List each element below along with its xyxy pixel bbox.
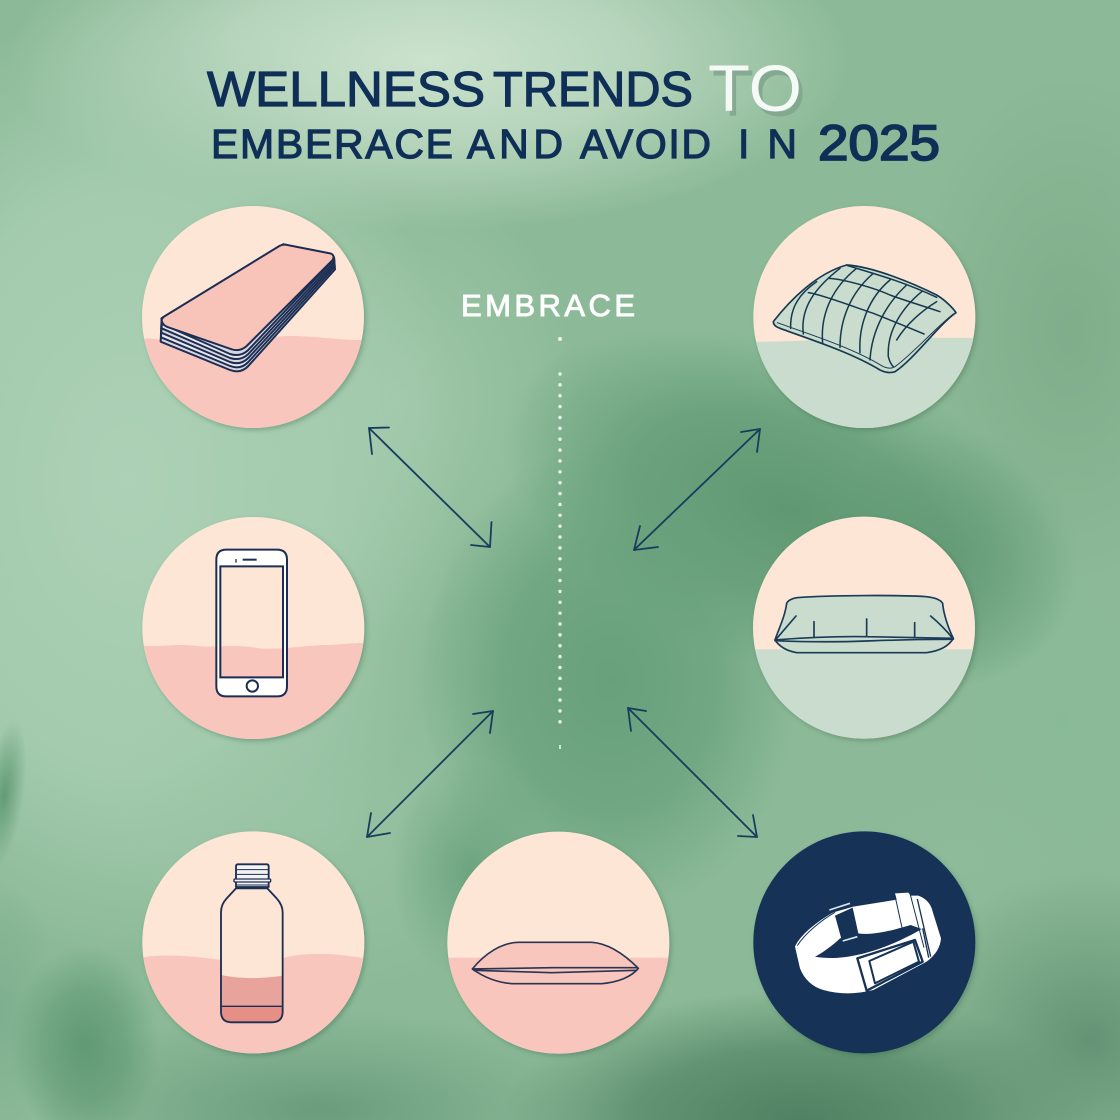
title line 1: WELLNESS — [207, 63, 485, 117]
arrow: top left — [369, 428, 492, 547]
title word: TO: TO — [708, 51, 802, 125]
title year: 2025 — [818, 115, 940, 171]
icon: fitness band — [795, 893, 941, 993]
title word: TO: TO — [712, 56, 806, 130]
panel: yoga mat circle — [142, 206, 364, 428]
arrow: bottom left — [367, 711, 493, 837]
icon: water bottle — [221, 864, 283, 1022]
dotted vertical divider — [558, 337, 562, 749]
icon: low pillow — [472, 942, 638, 984]
title — [207, 51, 940, 171]
icon: flat pillow — [775, 596, 953, 653]
title line 2 — [211, 121, 797, 167]
panel: flat pillow circle — [753, 517, 975, 739]
arrow: top right — [634, 429, 760, 550]
panel: phone circle — [142, 517, 364, 739]
title line 2: EMBERACE — [211, 121, 453, 167]
icon: smartphone — [216, 550, 287, 696]
title line 2: IN — [738, 121, 797, 167]
panel: low pillow circle — [447, 832, 669, 1054]
title line 2: AVOID — [580, 121, 711, 167]
title line 1 — [207, 63, 693, 117]
panel: fitness band circle — [753, 831, 975, 1053]
title line 1: TRENDS — [493, 63, 693, 117]
arrow: bottom right — [628, 708, 757, 837]
icon: stacked mat — [161, 244, 335, 371]
heading: embrace: EMBRACE — [461, 288, 635, 323]
icon: quilted pillow — [773, 265, 956, 373]
title line 2: AND — [467, 121, 563, 167]
panel: bottle circle — [142, 831, 364, 1053]
panel: quilted pillow circle — [753, 206, 975, 428]
